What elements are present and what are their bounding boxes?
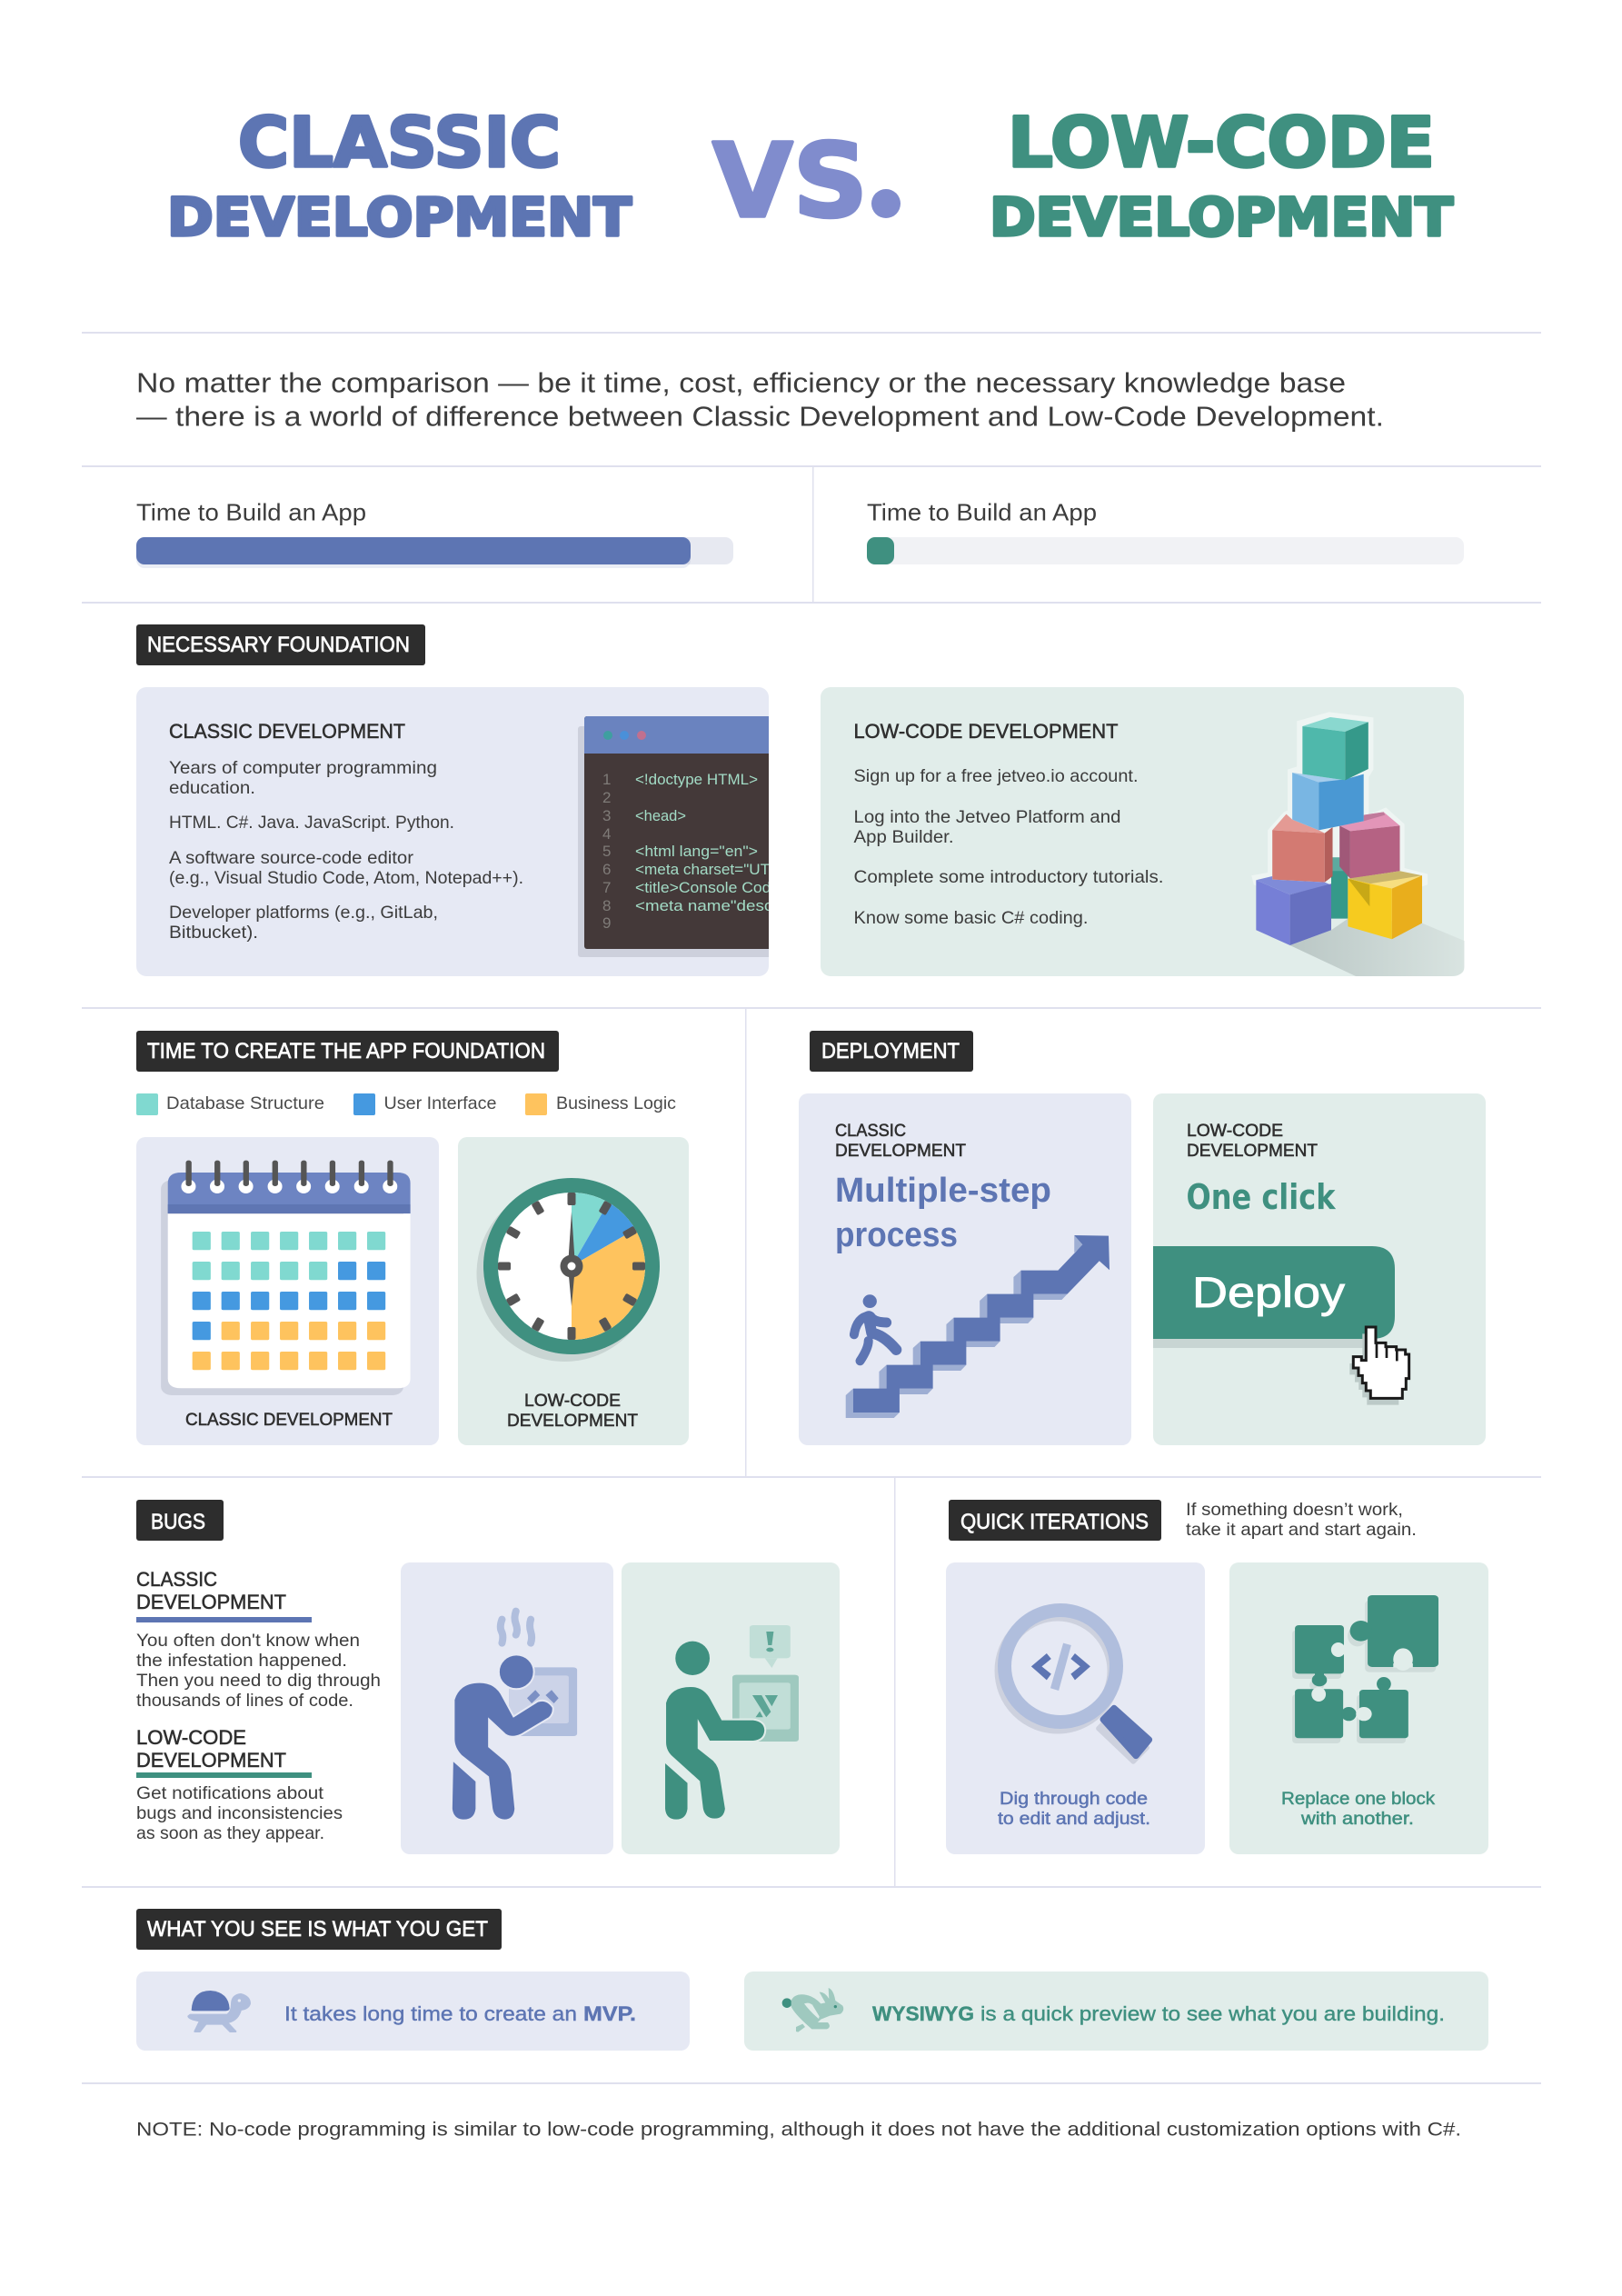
statement: MVP. (583, 2002, 636, 2025)
caption (1281, 1789, 1435, 1829)
text: classic bugs: thousands of lines of code. (136, 1691, 353, 1711)
code editor window: 2 (602, 789, 611, 806)
text: classic bugs: CLASSIC (136, 1568, 217, 1591)
caption: CLASSIC DEVELOPMENT (185, 1410, 393, 1430)
progress bar: classic time to build: Time to Build an App (136, 498, 366, 525)
text: low-code bugs: LOW-CODE (136, 1726, 246, 1749)
big statement: Multiple-step (835, 1172, 1051, 1210)
title: classic development (167, 102, 632, 248)
text: classic bugs: Then you need to dig through (136, 1671, 381, 1691)
big statement: One click (1187, 1177, 1336, 1217)
code editor window: 7 (602, 879, 611, 896)
icon: person with notification (665, 1625, 799, 1820)
code editor window: 8 (602, 897, 611, 914)
text: quick iterations note: take it apart and start again. (1186, 1520, 1417, 1540)
panel: classic foundation (136, 687, 835, 976)
requirements list: Years of computer programming (169, 758, 437, 778)
big statement: process (835, 1216, 958, 1254)
icon: calendar (161, 1161, 411, 1395)
panel: wysiwyg (744, 1972, 1488, 2051)
panel label: CLASSIC (835, 1121, 906, 1141)
icon: stairs with arrow (846, 1235, 1110, 1418)
heading: deployment: DEPLOYMENT (821, 1039, 960, 1063)
caption: to edit and adjust. (998, 1809, 1150, 1829)
heading: time to create the app foundation: TIME TO CREATE THE APP FOUNDATION (147, 1039, 545, 1063)
title: low-code development: LOW-CODE (1008, 102, 1435, 183)
title: vs: . (880, 173, 897, 225)
deploy button (1153, 1246, 1395, 1348)
intro text: — there is a world of difference between Classic Development and Low-Code Development. (136, 400, 1384, 433)
title: low-code development: DEVELOPMENT (990, 186, 1453, 248)
heading: bugs (136, 1500, 224, 1541)
statement: WYSIWYG (872, 2002, 974, 2025)
panel label: DEVELOPMENT (1187, 1141, 1318, 1161)
footnote: NOTE: No-code programming is similar to low-code programming, although it does not have the additional customization options with C#. (136, 2120, 1461, 2140)
text: classic bugs: You often don't know when (136, 1631, 360, 1651)
progress bar: low-code time to build: Time to Build an App (867, 498, 1097, 525)
big statement (835, 1172, 1051, 1254)
panel label: LOW-CODE (1187, 1121, 1283, 1141)
panel heading: CLASSIC DEVELOPMENT (169, 720, 405, 743)
statement: is a quick preview to see what you are building. (980, 2002, 1445, 2025)
heading: what you see is what you get: WHAT YOU SEE IS WHAT YOU GET (147, 1917, 488, 1942)
caption (998, 1789, 1150, 1829)
code editor window: 4 (602, 825, 611, 843)
title: low-code development (990, 102, 1453, 248)
icon: turtle (188, 1991, 250, 2031)
code editor window: 3 (602, 807, 611, 824)
icon: stacked cubes (1251, 712, 1464, 976)
caption (507, 1391, 638, 1431)
text: classic bugs (136, 1568, 381, 1711)
text: low-code bugs: bugs and inconsistencies (136, 1803, 343, 1823)
legend (136, 1093, 676, 1115)
text: quick iterations note (1186, 1500, 1417, 1540)
panel: replace blocks (1229, 1562, 1488, 1854)
legend: Business Logic (556, 1093, 676, 1113)
requirements list: Sign up for a free jetveo.io account. (854, 766, 1138, 786)
progress bar: classic time to build (136, 498, 733, 568)
icon: rabbit (782, 1988, 843, 2032)
title: vs: VS (712, 123, 868, 241)
progress bar: low-code time to build (867, 498, 1464, 564)
title: classic development: CLASSIC (238, 102, 561, 183)
heading: what you see is what you get (136, 1909, 502, 1950)
legend: Database Structure (166, 1093, 324, 1113)
icon: hand cursor (1349, 1327, 1409, 1405)
panel label (835, 1121, 966, 1161)
requirements list: Complete some introductory tutorials. (854, 867, 1163, 887)
panel heading: LOW-CODE DEVELOPMENT (854, 720, 1119, 743)
requirements list: (e.g., Visual Studio Code, Atom, Notepad++). (169, 868, 523, 888)
panel: low-code bug figure (622, 1562, 840, 1854)
icon: puzzle pieces (1292, 1595, 1438, 1743)
deploy button: Deploy (1192, 1268, 1346, 1316)
text: classic bugs: the infestation happened. (136, 1651, 347, 1671)
intro text (136, 367, 1384, 433)
text: classic bugs: DEVELOPMENT (136, 1591, 286, 1613)
code editor window (578, 716, 769, 957)
panel: classic deployment (799, 1093, 1131, 1445)
requirements list: HTML. C#. Java. JavaScript. Python. (169, 813, 454, 833)
code editor window: <!doctype HTML> (635, 771, 758, 788)
heading: necessary foundation (136, 624, 425, 665)
legend: User Interface (383, 1093, 496, 1113)
code editor window: 9 (602, 914, 611, 932)
code editor window: <meta charset="UTF-8"> (635, 861, 808, 878)
requirements list: App Builder. (854, 827, 954, 847)
text: low-code bugs: as soon as they appear. (136, 1823, 324, 1843)
panel: low-code deployment (1153, 1093, 1486, 1445)
panel: classic bug figure (401, 1562, 613, 1854)
caption: Replace one block (1281, 1789, 1435, 1809)
panel label (1187, 1121, 1318, 1161)
title: classic development: DEVELOPMENT (167, 186, 632, 248)
icon: clock (476, 1178, 660, 1362)
statement: It takes long time to create an (284, 2002, 577, 2025)
code editor window: <head> (635, 807, 686, 824)
caption: LOW-CODE (524, 1391, 621, 1411)
icon: magnifier with code (1001, 1611, 1149, 1762)
panel: classic calendar (136, 1137, 439, 1445)
code editor window: <title>Console Code</title> (635, 879, 828, 896)
heading: deployment (810, 1031, 973, 1072)
code editor window: <html lang="en"> (635, 843, 758, 860)
text: quick iterations note: If something doesn’t work, (1186, 1500, 1403, 1520)
panel: slow mvp (136, 1972, 690, 2051)
heading: quick iterations: QUICK ITERATIONS (960, 1510, 1149, 1534)
requirements list: Developer platforms (e.g., GitLab, (169, 903, 438, 923)
heading: time to create the app foundation (136, 1031, 559, 1072)
caption: with another. (1300, 1809, 1414, 1829)
heading: bugs: BUGS (151, 1510, 205, 1534)
panel label: DEVELOPMENT (835, 1141, 966, 1161)
heading: necessary foundation: NECESSARY FOUNDATION (147, 633, 410, 657)
icon: person climbing (854, 1294, 896, 1361)
code editor window: 1 (602, 771, 611, 788)
code editor window: <meta name"description"> (635, 897, 835, 914)
requirements list: A software source-code editor (169, 848, 414, 868)
panel: dig through code (946, 1562, 1205, 1854)
requirements list: Know some basic C# coding. (854, 908, 1089, 928)
code editor window: 5 (602, 843, 611, 860)
code editor window: 6 (602, 861, 611, 878)
panel: low-code foundation (821, 687, 1464, 976)
heading: quick iterations (949, 1500, 1161, 1541)
requirements list: Log into the Jetveo Platform and (854, 807, 1121, 827)
text: low-code bugs: DEVELOPMENT (136, 1749, 286, 1772)
intro text: No matter the comparison — be it time, cost, efficiency or the necessary knowledge base (136, 367, 1346, 398)
requirements list: Bitbucket). (169, 923, 258, 943)
panel: low-code clock (458, 1137, 689, 1445)
icon: frustrated person at screen (453, 1612, 577, 1821)
requirements list (854, 766, 1163, 928)
requirements list (169, 758, 523, 943)
text: low-code bugs: Get notifications about (136, 1783, 324, 1803)
caption: Dig through code (1000, 1789, 1148, 1809)
requirements list: education. (169, 778, 255, 798)
text: low-code bugs (136, 1726, 343, 1843)
caption: DEVELOPMENT (507, 1411, 638, 1431)
